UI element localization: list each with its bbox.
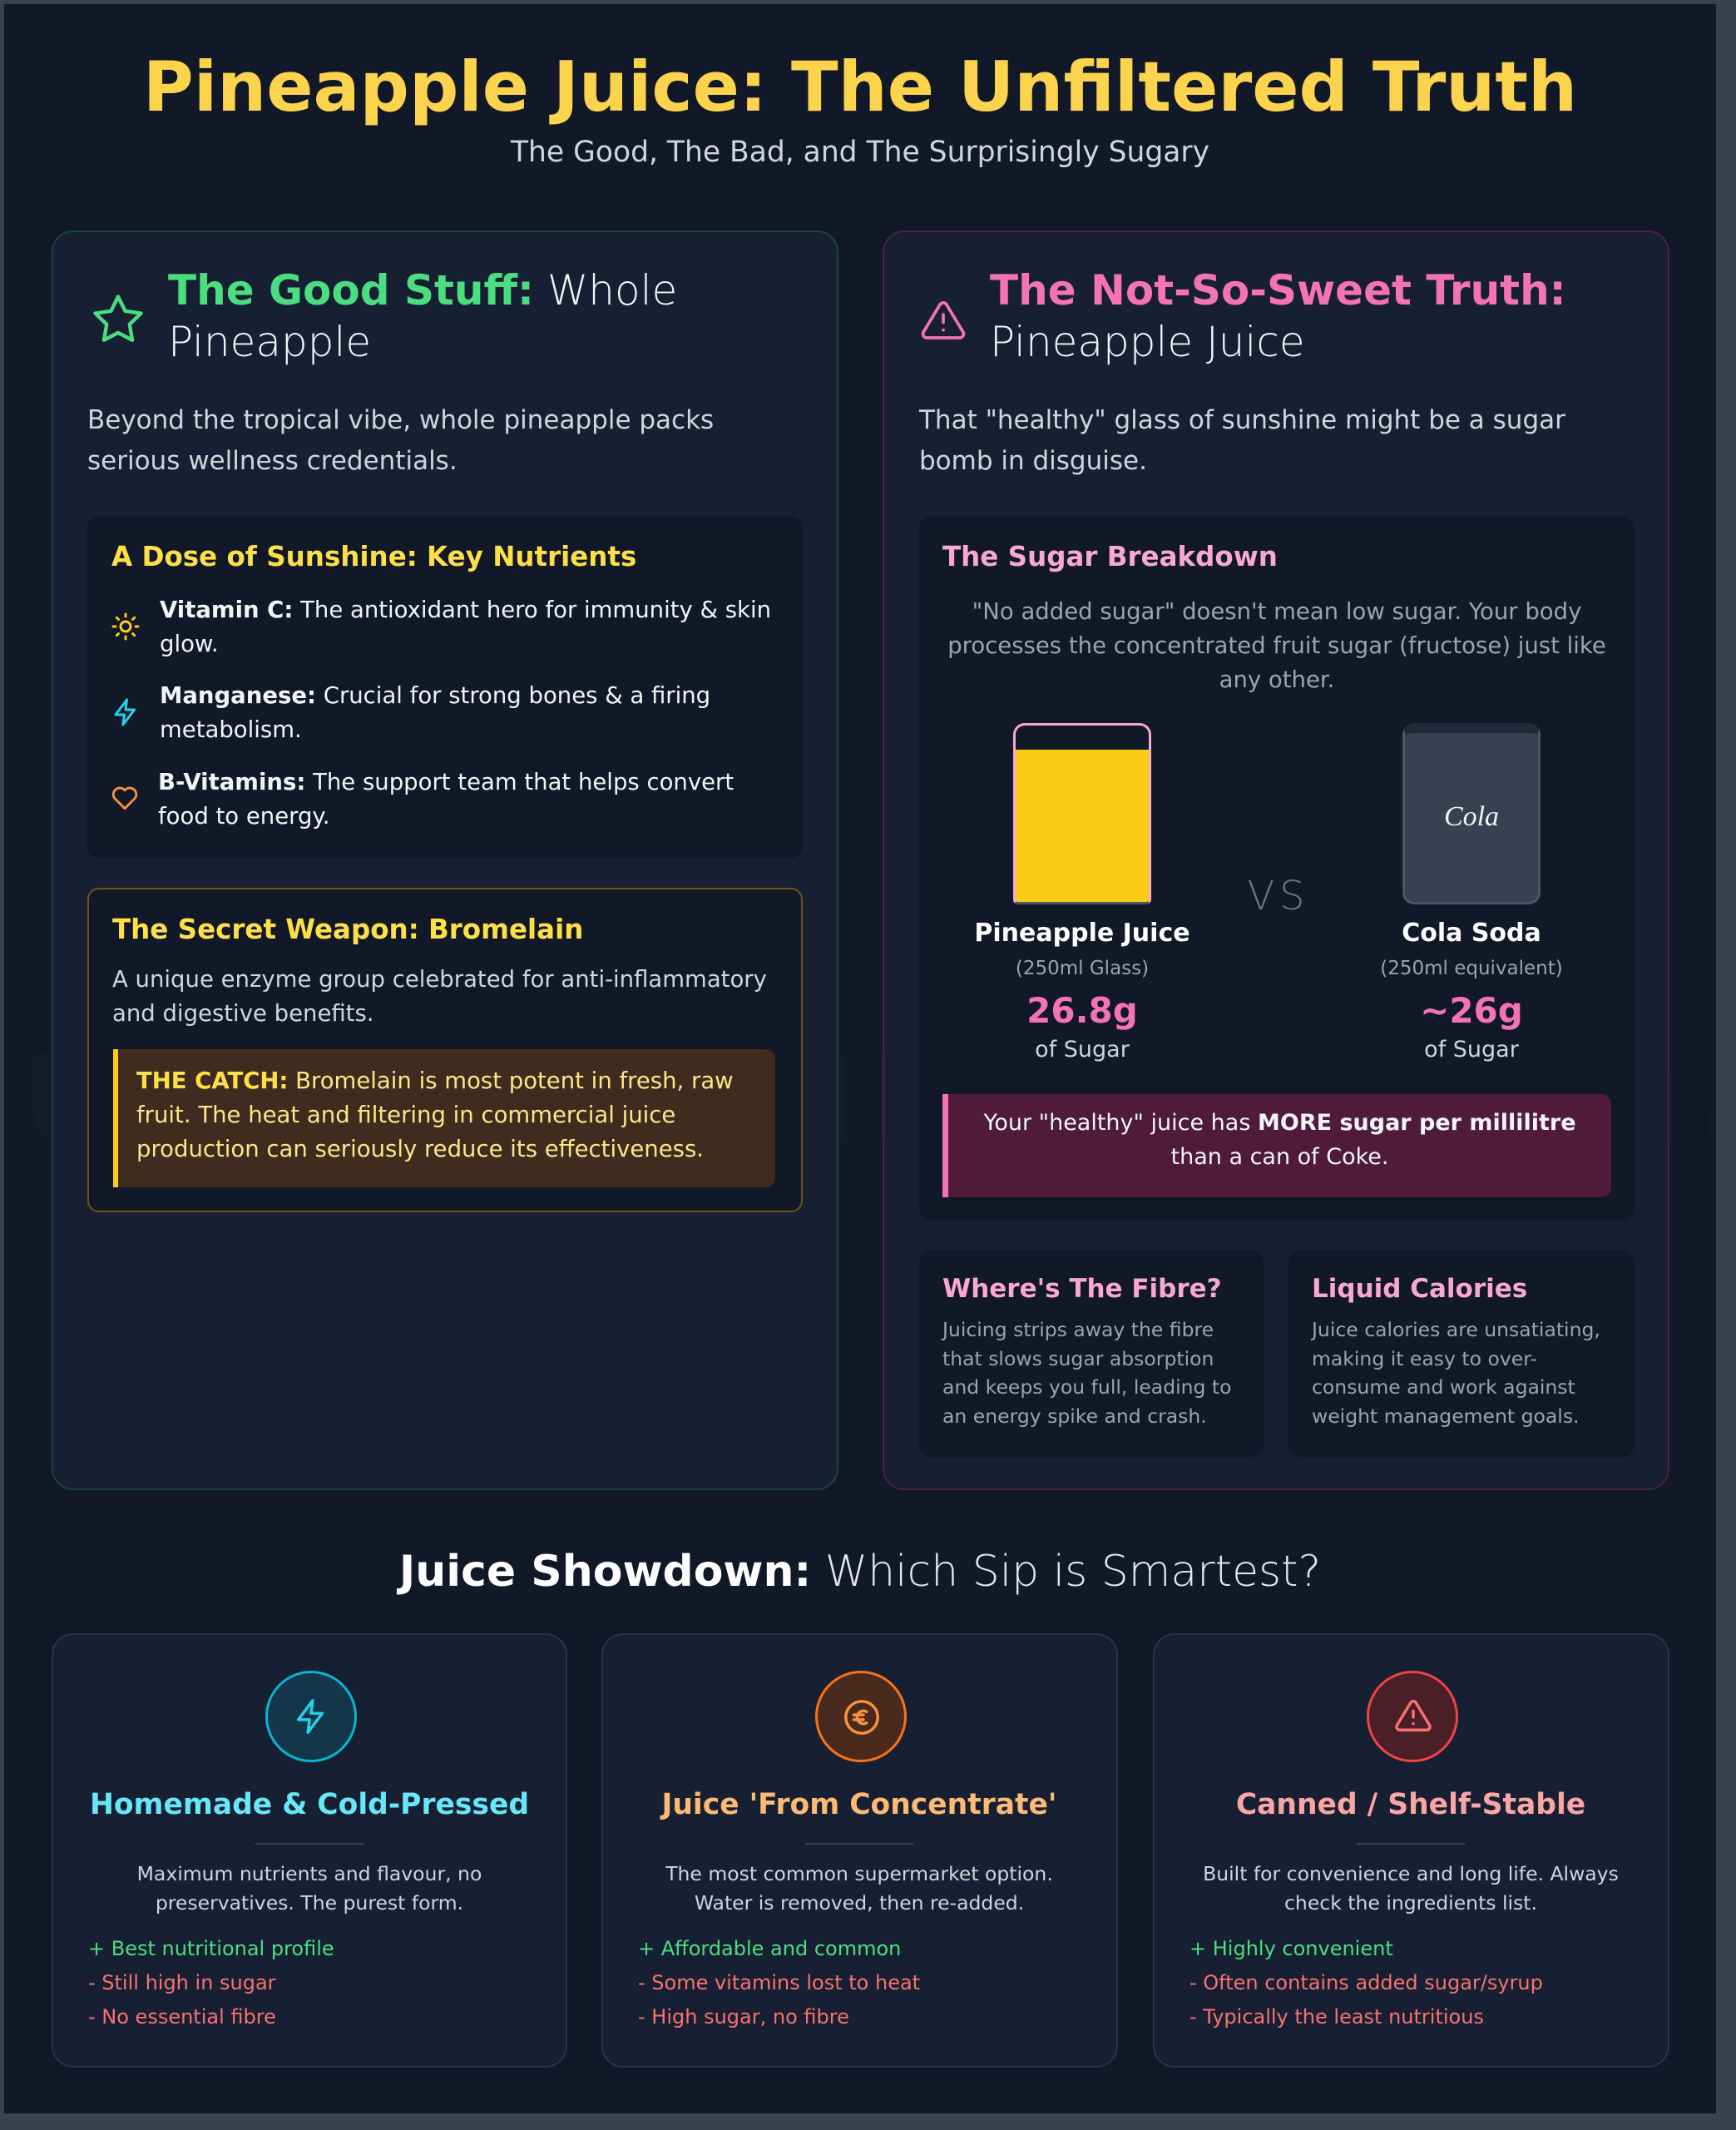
callout: the catch: THE CATCH: Bromelain is most potent in fresh, raw fruit. The heat and filtering in commercial juice production can seriously reduce its effectiveness.	[136, 1067, 734, 1162]
card: from concentrate: - High sugar, no fibre	[638, 2005, 849, 2028]
sugar description: "No added sugar" doesn't mean low sugar. Your body processes the concentrated fruit sugar (fructose) just like any other.	[947, 598, 1606, 693]
card: canned	[1153, 1633, 1669, 2068]
card: from concentrate: + Affordable and common	[638, 1937, 901, 1960]
callout: more sugar	[942, 1094, 1611, 1197]
callout: more sugar: Your "healthy" juice has MORE sugar per millilitre than a can of Coke.	[983, 1110, 1576, 1170]
icon: juice glass	[1013, 723, 1151, 904]
card: canned: Built for convenience and long life. Always check the ingredients list.	[1203, 1862, 1619, 1915]
juice stats: (250ml Glass)	[1016, 958, 1149, 979]
subtitle: The Good, The Bad, and The Surprisingly Sugary	[511, 136, 1209, 169]
cola stats: of Sugar	[1424, 1037, 1519, 1063]
box: bromelain	[87, 888, 803, 1212]
intro text: Beyond the tropical vibe, whole pineapple packs serious wellness credentials.	[87, 405, 714, 476]
card: homemade: Maximum nutrients and flavour, no preservatives. The purest form.	[137, 1862, 482, 1915]
box: sugar breakdown	[919, 517, 1635, 1221]
heading: The Good Stuff: Whole Pineapple	[168, 266, 677, 366]
icon: star	[93, 295, 143, 342]
cola stats: ~26g	[1420, 990, 1523, 1031]
bromelain text: A unique enzyme group celebrated for anti-inflammatory and digestive benefits.	[112, 966, 767, 1027]
box: liquid calories: Liquid Calories	[1312, 1274, 1527, 1304]
card: from concentrate: Juice 'From Concentrate'	[662, 1788, 1056, 1821]
juice stats	[974, 919, 1190, 1063]
box: fibre: Where's The Fibre?	[942, 1274, 1222, 1304]
cola stats: Cola Soda	[1402, 919, 1541, 948]
card: homemade: Homemade & Cold-Pressed	[90, 1788, 529, 1821]
card: canned: - Typically the least nutritious	[1189, 2005, 1484, 2028]
item: vitamin c: Vitamin C: The antioxidant hero for immunity & skin glow.	[160, 597, 771, 657]
item: manganese: Manganese: Crucial for strong bones & a firing metabolism.	[160, 682, 710, 743]
box: fibre: Juicing strips away the fibre that slows sugar absorption and keeps you full, leading to an energy spike and crash.	[942, 1318, 1232, 1428]
juice stats: of Sugar	[1035, 1037, 1130, 1063]
icon: bolt circle	[265, 1671, 357, 1762]
card: canned: - Often contains added sugar/syrup	[1189, 1971, 1543, 1994]
cola stats: (250ml equivalent)	[1380, 958, 1563, 979]
sugar heading: The Sugar Breakdown	[942, 541, 1278, 572]
card: canned: Canned / Shelf-Stable	[1236, 1788, 1585, 1821]
box: liquid calories	[1288, 1251, 1635, 1457]
vs label: VS	[1247, 873, 1310, 919]
card: homemade: - No essential fibre	[88, 2005, 276, 2028]
cola stats	[1380, 919, 1563, 1063]
nutrients heading: A Dose of Sunshine: Key Nutrients	[111, 541, 636, 572]
panel: not-so-sweet	[883, 230, 1669, 1490]
icon: warning circle	[1367, 1671, 1458, 1762]
juice stats: Pineapple Juice	[974, 919, 1190, 948]
icon: cola can	[1402, 723, 1541, 904]
icon: warning	[922, 301, 965, 339]
icon: euro circle	[815, 1671, 907, 1762]
bromelain heading: The Secret Weapon: Bromelain	[112, 914, 583, 945]
card: from concentrate	[601, 1633, 1118, 2068]
item: b-vitamins: B-Vitamins: The support team that helps convert food to energy.	[158, 769, 734, 830]
icon: cola can: Cola	[1444, 801, 1499, 832]
callout: the catch	[113, 1049, 775, 1187]
intro text: That "healthy" glass of sunshine might be a sugar bomb in disguise.	[919, 405, 1565, 476]
card: homemade: - Still high in sugar	[88, 1971, 276, 1994]
heading: The Not-So-Sweet Truth: Pineapple Juice	[990, 266, 1566, 366]
panel: good stuff	[52, 230, 838, 1490]
box: key nutrients	[87, 517, 803, 859]
card: from concentrate: - Some vitamins lost to heat	[638, 1971, 920, 1994]
title: Pineapple Juice: The Unfiltered Truth	[143, 47, 1577, 127]
card: homemade: + Best nutritional profile	[88, 1937, 334, 1960]
juice stats: 26.8g	[1026, 990, 1138, 1031]
section heading: showdown: Juice Showdown: Which Sip is Smartest?	[399, 1547, 1321, 1597]
box: fibre	[919, 1251, 1264, 1457]
card: from concentrate: The most common supermarket option. Water is removed, then re-added.	[665, 1862, 1053, 1915]
card: homemade	[52, 1633, 567, 2068]
box: liquid calories: Juice calories are unsatiating, making it easy to over-consume and work against weight management goals.	[1312, 1318, 1600, 1428]
card: canned: + Highly convenient	[1189, 1937, 1393, 1960]
